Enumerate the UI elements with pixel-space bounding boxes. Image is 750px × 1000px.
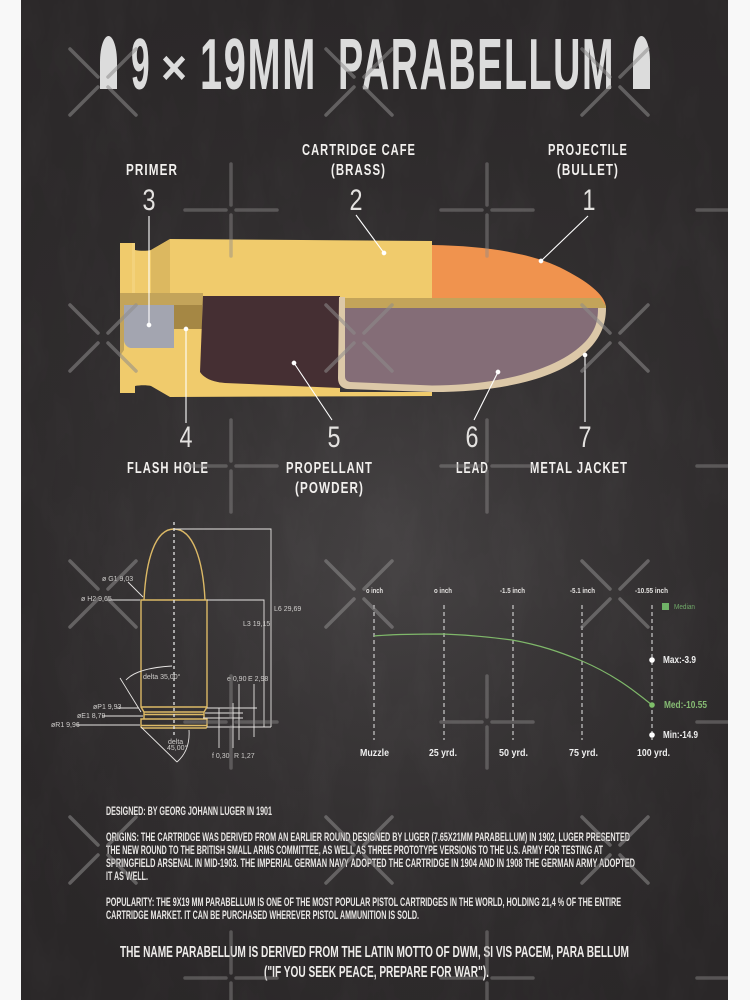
icon: bullet right	[633, 36, 650, 89]
range gridlines	[374, 605, 652, 740]
legend: median: Median	[674, 604, 695, 611]
dimension labels: e 0,90	[227, 676, 247, 683]
part labels top: CARTRIDGE CAFE	[302, 142, 416, 159]
part numbers bottom: 4	[180, 421, 192, 454]
cartridge outline	[141, 529, 207, 728]
part labels bottom	[127, 460, 628, 497]
closing quote: ("IF YOU SEEK PEACE, PREPARE FOR WAR").	[264, 964, 489, 981]
legend: median	[662, 603, 695, 611]
part numbers top: 2	[350, 184, 362, 217]
drop labels	[366, 586, 668, 595]
range labels	[360, 747, 670, 759]
title: 9	[131, 25, 151, 105]
propellant	[200, 296, 340, 388]
part numbers bottom: 7	[578, 421, 592, 454]
dimension labels: delta	[168, 739, 183, 746]
callout lines	[147, 215, 588, 423]
brass case	[120, 239, 432, 397]
dimension labels: øE1 8,79	[77, 713, 106, 720]
part labels bottom: METAL JACKET	[530, 460, 628, 477]
dimension labels: øR1 9,96	[51, 722, 80, 729]
range labels: 50 yrd.	[499, 747, 528, 759]
median point: Med:-10.55	[664, 699, 707, 711]
part labels bottom: (POWDER)	[295, 480, 364, 497]
drop labels: o inch	[434, 586, 452, 595]
part numbers top: 1	[582, 184, 596, 217]
center line	[173, 522, 175, 735]
dimension labels: ø G1 9,03	[102, 576, 133, 583]
part labels bottom: FLASH HOLE	[127, 460, 209, 477]
title	[100, 25, 650, 105]
drop labels: -10.55 inch	[635, 586, 668, 595]
dimension labels: E 2,98	[248, 676, 268, 683]
text block: history	[106, 806, 635, 922]
drop labels: -1.5 inch	[500, 586, 525, 595]
text block: history: IT AS WELL.	[106, 871, 148, 883]
dimension labels: L6 29,69	[274, 606, 301, 613]
part numbers bottom: 6	[466, 421, 478, 454]
drop labels: o inch	[366, 586, 383, 595]
part labels top: (BULLET)	[557, 162, 619, 179]
range labels: Muzzle	[360, 747, 389, 759]
case shading	[151, 239, 170, 293]
part numbers bottom: 5	[328, 421, 340, 454]
part labels top: (BRASS)	[331, 162, 386, 179]
trajectory chart	[360, 586, 707, 759]
dimension labels: L3 19,15	[243, 621, 270, 628]
part labels top: PROJECTILE	[548, 142, 628, 159]
text block: history: CARTRIDGE MARKET. IT CAN BE PURCHASED WHEREVER PISTOL AMMUNITION IS SOLD.	[106, 910, 419, 922]
dimension labels: ø H2 9,65	[81, 596, 112, 603]
drop labels: -5.1 inch	[570, 586, 595, 595]
icon: bullet left	[100, 36, 117, 89]
dimension labels: R 1,27	[234, 753, 255, 760]
part labels top	[126, 142, 628, 179]
range labels: 75 yrd.	[569, 747, 598, 759]
max point	[649, 654, 696, 666]
lead	[345, 308, 598, 386]
part labels top: PRIMER	[126, 162, 178, 179]
part numbers bottom	[180, 421, 592, 454]
range labels: 100 yrd.	[637, 747, 670, 759]
trajectory curve	[374, 634, 652, 705]
bullet cross-section	[120, 239, 606, 397]
metal jacket	[338, 297, 606, 392]
technical drawing	[51, 522, 301, 762]
part numbers top	[142, 184, 596, 217]
text block: history: DESIGNED: BY GEORG JOHANN LUGER IN 1901	[106, 806, 272, 818]
dimension labels: delta 35,00°	[143, 673, 181, 681]
projectile jacket top	[432, 245, 606, 308]
median point	[649, 699, 707, 711]
min point: Min:-14.9	[663, 729, 698, 741]
title: ×	[161, 42, 187, 95]
dimension labels	[51, 576, 301, 760]
part numbers top: 3	[142, 184, 156, 217]
part labels bottom: PROPELLANT	[286, 460, 373, 477]
part labels bottom: LEAD	[456, 460, 489, 477]
closing quote	[120, 944, 629, 981]
range labels: 25 yrd.	[429, 747, 457, 759]
inner strip	[120, 293, 203, 356]
min point	[649, 729, 698, 741]
title: 19MM	[200, 25, 317, 105]
dimension labels: f 0,30	[212, 753, 230, 760]
dimension lines	[77, 529, 271, 762]
dimension labels: øP1 9,93	[93, 704, 122, 711]
primer	[124, 305, 174, 348]
max point: Max:-3.9	[663, 654, 696, 666]
dimension labels: 45,00°	[167, 744, 188, 752]
